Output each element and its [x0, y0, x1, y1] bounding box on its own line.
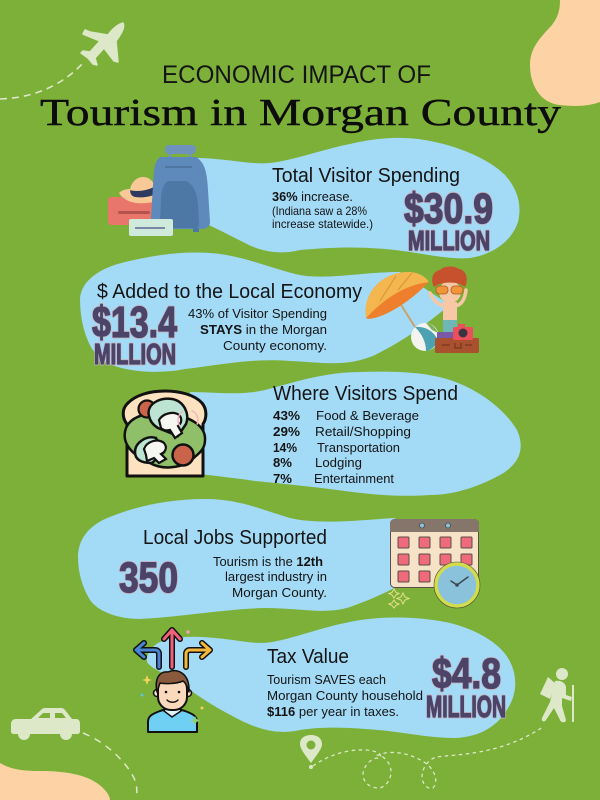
list: spending categories: Entertainment [314, 471, 394, 486]
stat: $30.9 million: MILLION [408, 225, 490, 256]
list: spending categories: 7% [273, 471, 292, 486]
stat: $4.8 million: $4.8 [432, 650, 501, 698]
text: household savings: Morgan County household [267, 688, 423, 703]
text: industry rank: largest industry in [225, 569, 327, 584]
heading: tax value: Tax Value [267, 646, 349, 668]
heading: economic impact of: ECONOMIC IMPACT OF [162, 61, 431, 89]
peach blob: top right [530, 0, 600, 106]
list: spending categories: Transportation [317, 440, 400, 455]
heading: added to the local economy: $ Added to the Local Economy [97, 281, 362, 303]
stat: $13.4 million [92, 298, 177, 371]
panel: where visitors spend [123, 372, 521, 496]
panel: total visitor spending [108, 138, 519, 258]
stat: $30.9 million [404, 185, 493, 256]
stat: $13.4 million: MILLION [94, 339, 176, 371]
stat: $30.9 million: $30.9 [404, 185, 493, 233]
text: household savings [267, 672, 423, 719]
text: household savings: Tourism SAVES each [267, 672, 386, 687]
icon: airplane with dashed trail [0, 23, 124, 99]
list: spending categories [273, 408, 419, 486]
title: Tourism in Morgan County [40, 92, 561, 134]
list: spending categories: Food & Beverage [316, 408, 419, 423]
heading: total visitor spending: Total Visitor Spending [272, 165, 460, 187]
icon: toast with salad [123, 391, 206, 476]
icon: calendar with clock [389, 519, 480, 608]
list: spending categories: 29% [273, 424, 300, 439]
icon: car with dashed trail [11, 708, 137, 797]
panel: tax value [136, 617, 515, 738]
icon: beach umbrella, boy, ball and suitcase [365, 266, 479, 353]
panel: added to the local economy [80, 253, 479, 372]
icon: person with three arrows [136, 630, 210, 732]
text: increase note: (Indiana saw a 28% [272, 204, 367, 218]
list: spending categories: Retail/Shopping [315, 424, 411, 439]
icon: hiker [540, 668, 574, 722]
stat: $13.4 million: MILLION [94, 339, 176, 371]
text: household savings: $116 per year in taxes. [267, 704, 399, 719]
text: industry rank: Tourism is the 12th [213, 554, 323, 569]
text: share that stays: STAYS in the Morgan [200, 322, 327, 337]
list: spending categories: 8% [273, 455, 292, 470]
text: share that stays [188, 306, 327, 353]
stat: $4.8 million [426, 650, 506, 724]
stat: $13.4 million: $13.4 [92, 298, 177, 347]
stat: $13.4 million: $13.4 [92, 298, 177, 347]
list: spending categories: 14% [273, 440, 297, 455]
stat: 350 jobs: 350 [119, 554, 178, 602]
panel: local jobs supported [78, 499, 480, 619]
heading: where visitors spend: Where Visitors Spend [273, 383, 458, 405]
text: increase note: increase statewide.) [272, 217, 373, 231]
list: spending categories: 43% [273, 408, 300, 423]
stat: 350 jobs: 350 [119, 554, 178, 602]
text: increase note: 36% increase. [272, 189, 353, 204]
stat: $4.8 million: MILLION [426, 689, 506, 724]
peach blob: bottom left [0, 763, 110, 800]
text: share that stays: County economy. [223, 338, 327, 353]
text: industry rank [213, 554, 327, 600]
stat: $4.8 million: MILLION [426, 689, 506, 724]
stat: $4.8 million: $4.8 [432, 650, 501, 698]
list: spending categories: Lodging [315, 455, 362, 470]
icon: map pin with dashed route [300, 727, 543, 788]
heading: local jobs supported: Local Jobs Supported [143, 527, 327, 549]
text: share that stays: 43% of Visitor Spending [188, 306, 327, 321]
stat: $30.9 million: MILLION [408, 225, 490, 256]
text: industry rank: Morgan County. [232, 585, 327, 600]
icon: luggage with hat [108, 145, 210, 236]
stat: $30.9 million: $30.9 [404, 185, 493, 233]
text: increase note [272, 189, 373, 231]
